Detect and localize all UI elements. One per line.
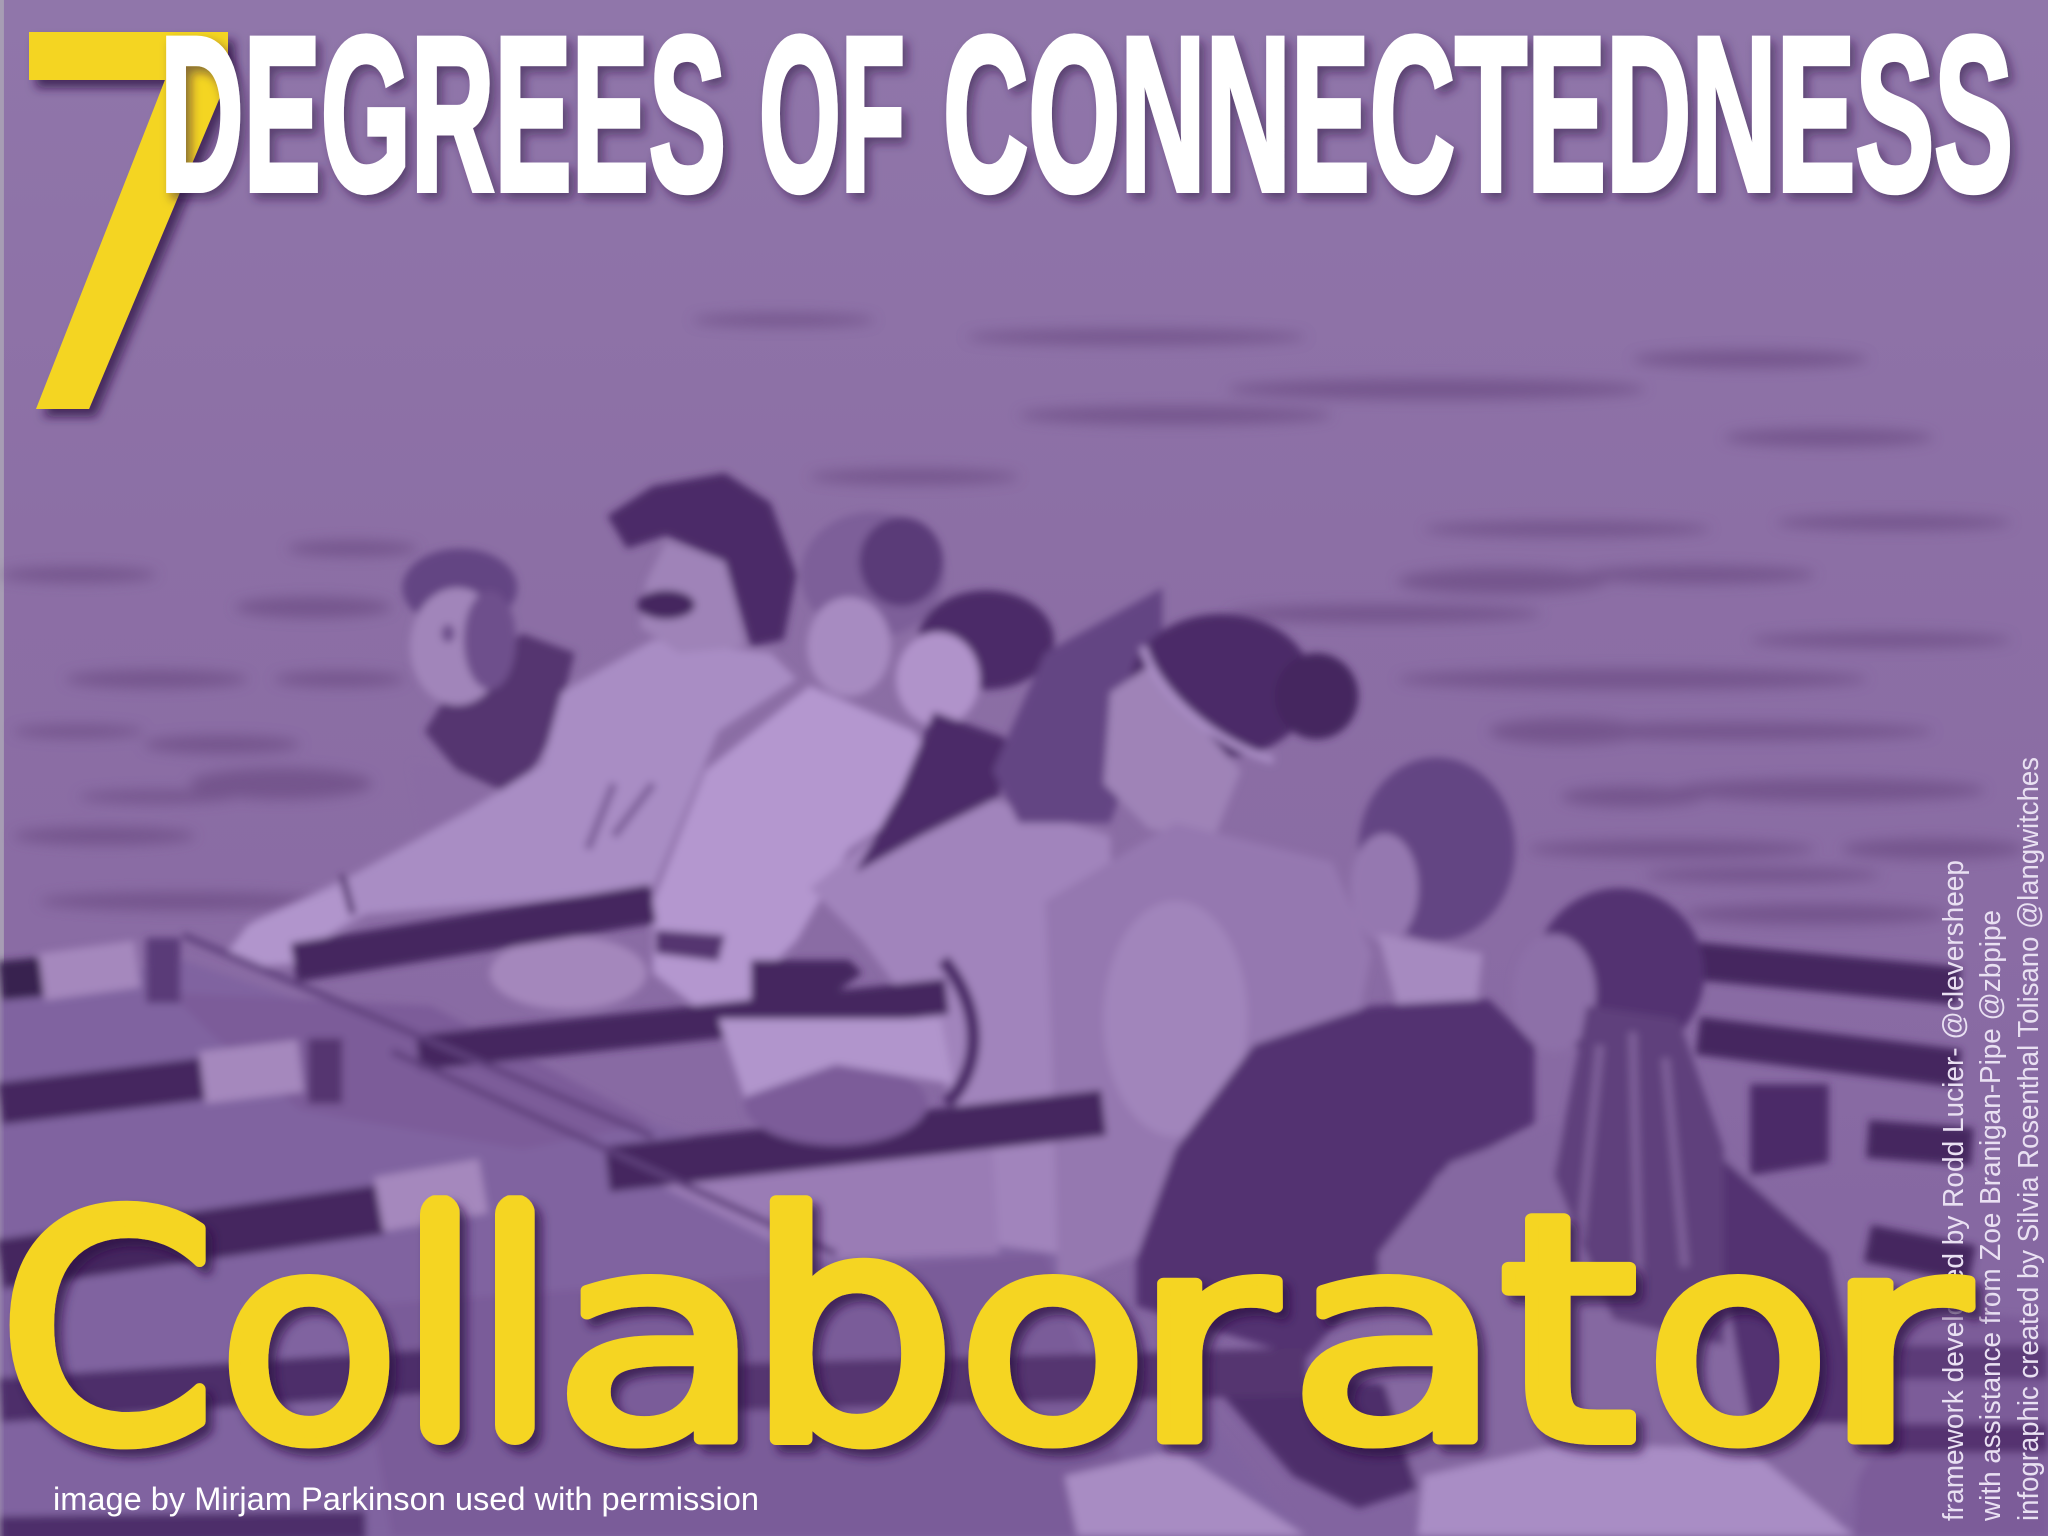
bottom light shapes bbox=[1417, 1443, 1855, 1536]
rowers and oars bbox=[0, 473, 2048, 1536]
lower bands bbox=[0, 1371, 431, 1400]
heading: Collaborator: C bbox=[0, 1148, 217, 1513]
rower 6: dark shirt bbox=[1358, 758, 1515, 940]
title: degrees of connectedness bbox=[160, 0, 2013, 237]
rigger lines bbox=[183, 935, 836, 1254]
big yellow numeral 7 bbox=[29, 32, 228, 409]
heading: Collaborator: l bbox=[396, 1148, 483, 1513]
heading: Collaborator: o bbox=[1645, 1176, 1831, 1507]
heading: Collaborator: l bbox=[471, 1148, 558, 1513]
rower 1: coxswain bbox=[424, 633, 575, 797]
heading: Collaborator: r bbox=[1822, 1175, 1973, 1507]
heading: Collaborator bbox=[10, 1195, 1990, 1464]
heading: Collaborator: a bbox=[553, 1175, 762, 1507]
rower 2: sunglasses, reaching arm bbox=[229, 640, 797, 964]
credits: vertical attribution text: infographic created by Silvia Rosenthal Tolisano @langwitches bbox=[2013, 757, 2045, 1521]
water ripples bbox=[0, 313, 2024, 925]
credits: vertical attribution text bbox=[1938, 757, 2045, 1522]
seat details bbox=[751, 960, 862, 1012]
heading: Collaborator: o bbox=[218, 1175, 400, 1507]
right-side oars bbox=[1685, 960, 1972, 1264]
boat area bbox=[0, 960, 1306, 1536]
oar 2 bbox=[418, 997, 947, 1053]
image credit: image by Mirjam Parkinson used with permission bbox=[53, 1481, 759, 1517]
heading: Collaborator: a bbox=[1288, 1176, 1503, 1507]
rower 7: long ponytail bbox=[1750, 1084, 1829, 1176]
heading: Collaborator: t bbox=[1499, 1148, 1638, 1513]
rower 3 bbox=[801, 512, 944, 637]
rower 4 bbox=[810, 784, 1117, 1254]
oar 3 bbox=[607, 1113, 1104, 1169]
credits: vertical attribution text: with assistance from Zoe Branigan-Pipe @zbpipe bbox=[1975, 910, 2007, 1522]
rower 5: curly hair and bun bbox=[993, 588, 1162, 823]
heading: Collaborator: b bbox=[746, 1150, 957, 1514]
oar 1 bbox=[294, 904, 653, 963]
heading: Collaborator: o bbox=[957, 1174, 1149, 1507]
credits: vertical attribution text: framework developed by Rodd Lucier- @cleversheep bbox=[1938, 860, 1970, 1521]
heading: Collaborator: r bbox=[1132, 1176, 1280, 1507]
